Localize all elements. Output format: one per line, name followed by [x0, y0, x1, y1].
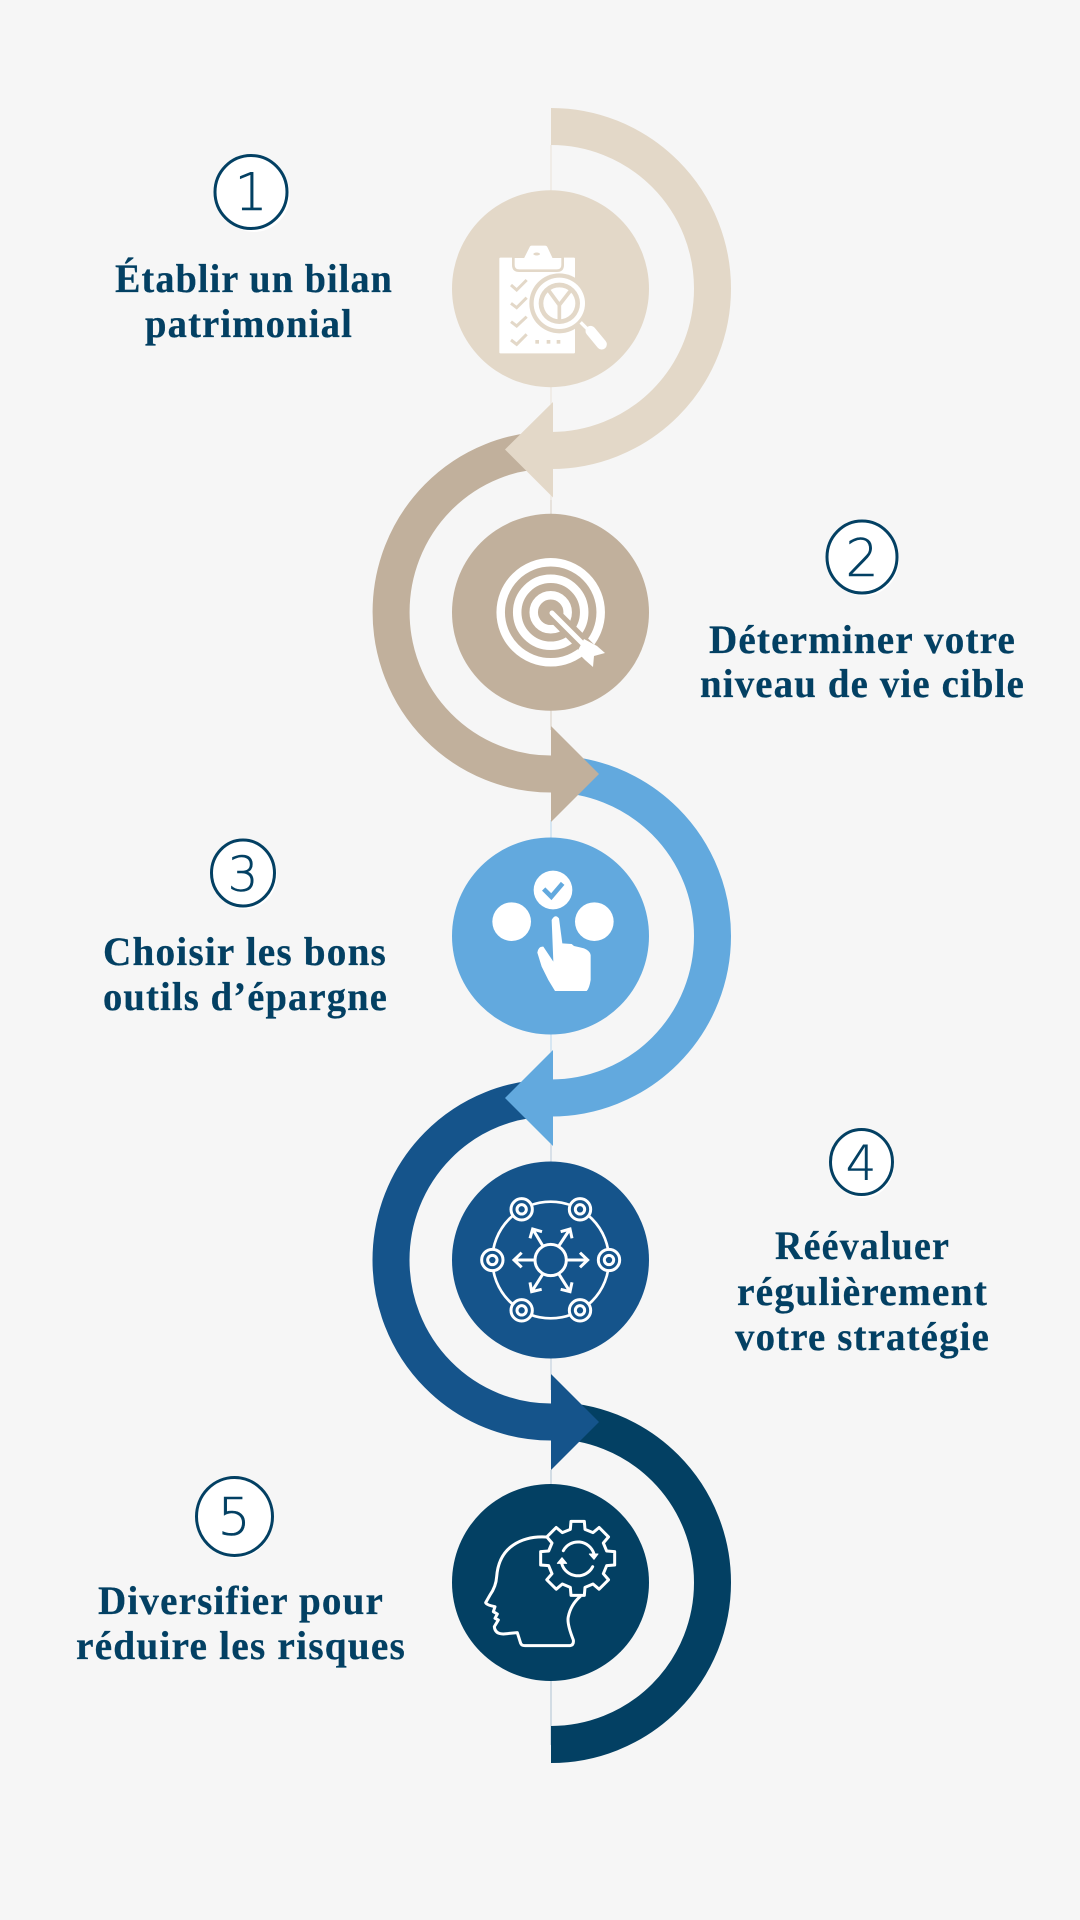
arc 5: [551, 1420, 712, 1744]
heading 4: Réévaluer: [775, 1223, 950, 1268]
heading 5: Diversifier pour: [98, 1578, 384, 1623]
number badge 1: [215, 156, 290, 232]
heading 4: régulièrement: [737, 1269, 988, 1314]
arc 4 with arrow: [391, 1098, 599, 1470]
heading 3: Choisir les bons: [103, 929, 387, 974]
step 1 label: [115, 156, 393, 346]
step 4 label: [735, 1130, 990, 1359]
heading 3: outils d’épargne: [103, 974, 388, 1019]
heading 2: Déterminer votre: [709, 617, 1016, 662]
number badge 2: [827, 521, 899, 596]
number badge 5: [196, 1478, 273, 1558]
number badge 5: 5: [217, 1488, 251, 1548]
arc 3 with arrow: [505, 774, 712, 1146]
arc 1 with arrow: [505, 126, 712, 498]
heading 1: Établir un bilan: [115, 256, 393, 301]
number badge 3: 3: [228, 847, 258, 903]
heading 5: réduire les risques: [76, 1623, 406, 1668]
arc 2 with arrow: [391, 450, 599, 822]
heading 1: patrimonial: [145, 301, 353, 346]
number badge 4: [830, 1130, 894, 1198]
icon: clipboard with magnifier: [452, 190, 649, 387]
diagram: spiral of arcs: [391, 126, 712, 1744]
heading 4: votre stratégie: [735, 1314, 990, 1359]
icon: choice hand: [452, 838, 649, 1034]
step 3 label: [103, 840, 388, 1019]
number badge 4: 4: [846, 1136, 876, 1192]
number badge 1: 1: [234, 163, 268, 223]
number badge 2: 2: [845, 529, 879, 589]
heading 2: niveau de vie cible: [700, 661, 1025, 706]
step 5 label: [76, 1478, 406, 1668]
number badge 3: [212, 840, 277, 909]
icon: target and arrow: [452, 514, 649, 711]
icon: head with gear: [452, 1484, 649, 1681]
icon: network of arrows: [452, 1162, 649, 1358]
step 2 label: [700, 521, 1025, 706]
